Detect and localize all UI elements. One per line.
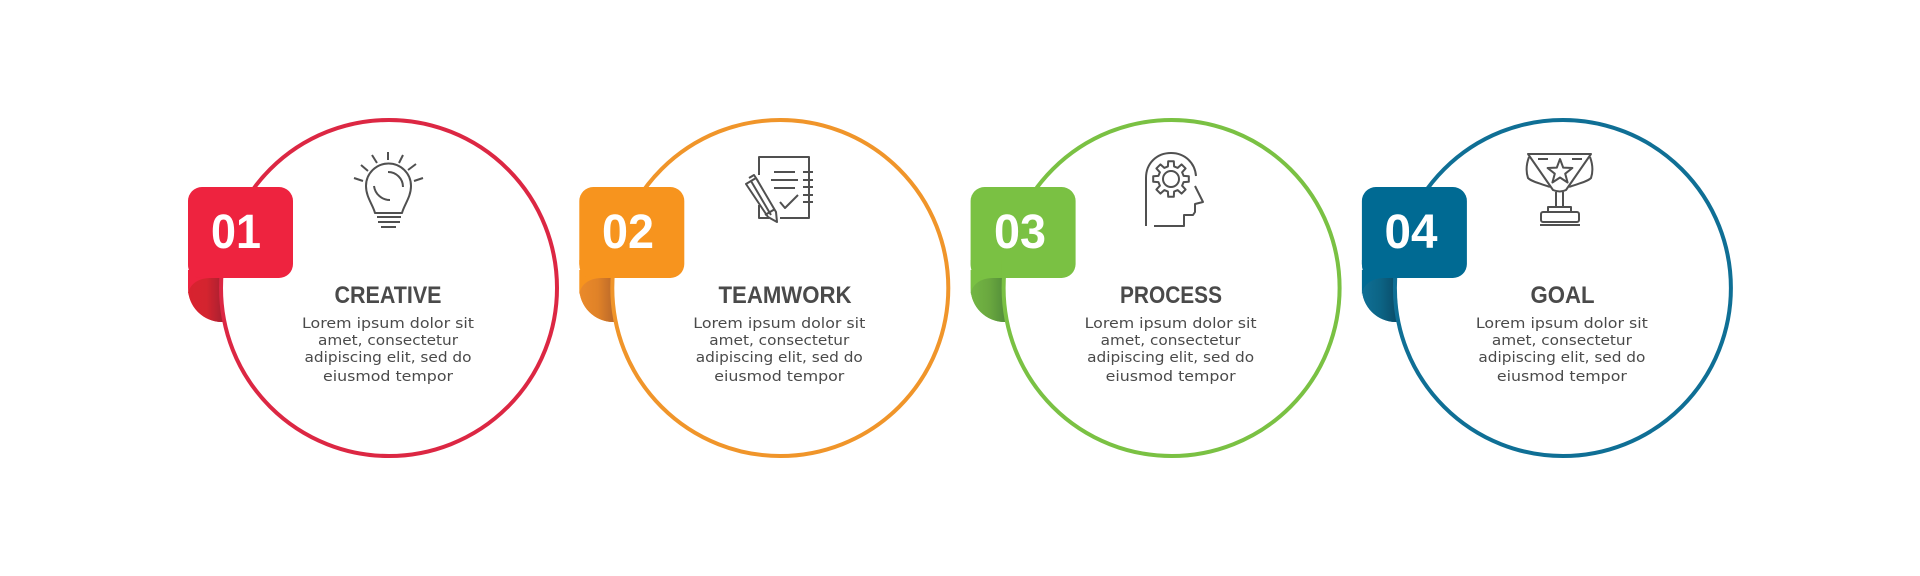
circle outline	[612, 120, 948, 456]
panel: 01 creative	[188, 120, 557, 456]
number badge	[188, 187, 293, 278]
fold shade	[579, 278, 616, 322]
icon: notebook and pen	[746, 157, 813, 222]
fold shade	[1362, 278, 1399, 322]
heading: TEAMWORK	[718, 282, 852, 309]
ribbon fold	[579, 270, 631, 322]
number badge	[971, 187, 1076, 278]
heading: GOAL	[1530, 282, 1594, 309]
number badge: 02	[602, 206, 654, 259]
heading: PROCESS	[1120, 282, 1222, 309]
fold shade	[188, 278, 225, 322]
number badge: 03	[994, 206, 1046, 259]
number badge: 04	[1384, 206, 1438, 259]
ribbon fold	[188, 270, 240, 322]
body text: Lorem ipsum dolor sit	[302, 316, 474, 332]
body text: eiusmod tempor	[1497, 369, 1627, 385]
body text	[1085, 316, 1257, 385]
panel: 03 process	[971, 120, 1340, 456]
body text: Lorem ipsum dolor sit	[693, 316, 866, 332]
panel: 04 goal	[1362, 120, 1731, 456]
body text: eiusmod tempor	[714, 369, 844, 385]
ribbon fold	[1362, 270, 1414, 322]
body text: amet, consectetur	[318, 333, 458, 349]
body text: amet, consectetur	[1101, 333, 1241, 349]
icon: trophy	[1527, 154, 1592, 225]
body text: eiusmod tempor	[323, 369, 453, 385]
circle outline	[221, 120, 557, 456]
icon: light bulb	[354, 152, 423, 227]
body text: adipiscing elit, sed do	[696, 350, 863, 366]
ribbon fold	[971, 270, 1023, 322]
body text: amet, consectetur	[709, 333, 849, 349]
number badge: 01	[211, 206, 261, 259]
number badge	[579, 187, 684, 278]
fold shade	[971, 278, 1008, 322]
icon: head with gear	[1146, 153, 1203, 226]
body text: amet, consectetur	[1492, 333, 1632, 349]
panel: 02 teamwork	[579, 120, 948, 456]
circle outline	[1395, 120, 1731, 456]
number badge	[1362, 187, 1467, 278]
body text: adipiscing elit, sed do	[1087, 350, 1254, 366]
circle outline	[1004, 120, 1340, 456]
heading: CREATIVE	[334, 282, 442, 309]
body text: Lorem ipsum dolor sit	[1476, 316, 1648, 332]
body text: eiusmod tempor	[1106, 369, 1236, 385]
body text	[1476, 316, 1648, 385]
body text: Lorem ipsum dolor sit	[1085, 316, 1257, 332]
body text	[302, 316, 474, 385]
body text: adipiscing elit, sed do	[1478, 350, 1646, 366]
body text: adipiscing elit, sed do	[304, 350, 472, 366]
body text	[693, 316, 866, 385]
